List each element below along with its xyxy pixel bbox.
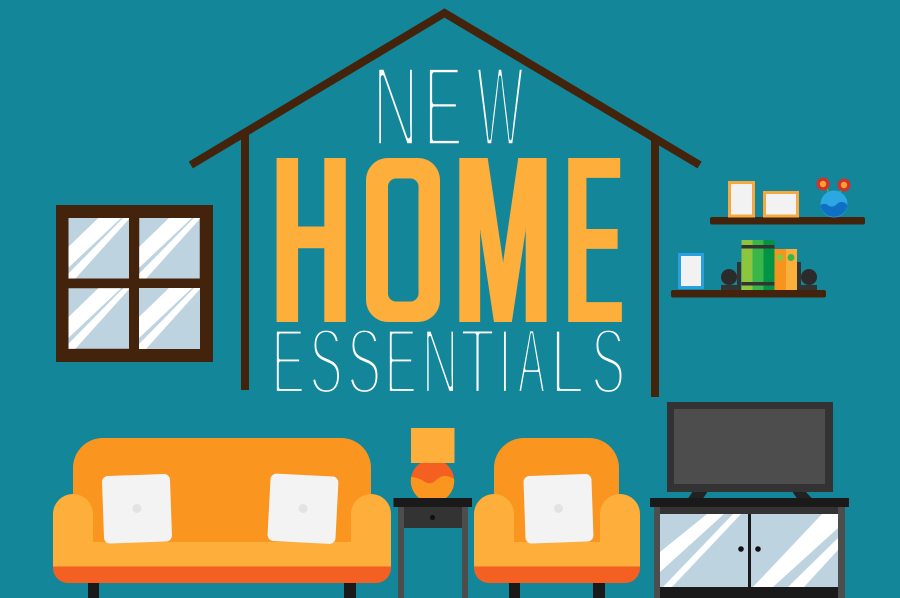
sofa bbox=[53, 438, 391, 598]
landscape frame bbox=[764, 192, 798, 216]
shelf board bbox=[710, 217, 865, 224]
drawer knob bbox=[430, 515, 435, 520]
lamp bbox=[410, 428, 454, 498]
title: new: W bbox=[476, 41, 524, 171]
title: essentials: A bbox=[518, 309, 546, 414]
chair cushion bbox=[523, 474, 594, 544]
sofa legs bbox=[88, 583, 356, 598]
chair back bbox=[494, 438, 619, 545]
door knobs bbox=[738, 546, 761, 552]
left door glass bbox=[660, 514, 748, 587]
cabinet sides bbox=[654, 507, 845, 598]
chair seat and arms bbox=[474, 494, 640, 567]
sofa back bbox=[73, 438, 371, 545]
cabinet upper rail bbox=[660, 507, 838, 514]
window bbox=[56, 205, 213, 362]
upper shelf bbox=[710, 178, 865, 224]
orange books bbox=[774, 249, 797, 290]
cabinet top bbox=[650, 498, 849, 507]
table legs bbox=[398, 507, 468, 598]
lamp shade bbox=[411, 428, 454, 463]
table top bbox=[394, 498, 472, 507]
green books bbox=[742, 240, 774, 290]
tv screen bbox=[674, 409, 825, 484]
title: home: O bbox=[359, 92, 447, 386]
sofa base bbox=[53, 566, 391, 583]
title: essentials: S bbox=[591, 310, 625, 415]
title: essentials: S bbox=[309, 309, 343, 414]
lower shelf bbox=[671, 240, 826, 298]
house outline bbox=[191, 13, 700, 397]
armchair bbox=[474, 438, 640, 598]
title: essentials: N bbox=[422, 310, 459, 415]
title: home: E bbox=[566, 100, 622, 380]
tv body bbox=[667, 402, 833, 492]
chair legs bbox=[509, 583, 605, 598]
tv stand feet bbox=[688, 491, 812, 498]
title: home: H bbox=[272, 100, 350, 379]
title: essentials: I bbox=[498, 309, 512, 414]
title: new bbox=[372, 41, 524, 171]
right speaker bbox=[797, 262, 817, 290]
title: essentials: T bbox=[460, 310, 495, 414]
title: home: M bbox=[454, 102, 551, 380]
lamp base bbox=[410, 463, 454, 498]
title: new: E bbox=[423, 42, 463, 171]
shelf board bbox=[671, 290, 826, 298]
roof bbox=[191, 13, 700, 165]
left cushion bbox=[102, 474, 172, 544]
right wall bbox=[651, 140, 659, 397]
sofa seat and arms bbox=[53, 494, 391, 567]
left speaker bbox=[721, 262, 741, 290]
portrait frame bbox=[730, 182, 754, 216]
tv cabinet bbox=[650, 498, 849, 598]
title: essentials: E bbox=[384, 308, 417, 414]
table drawer bbox=[404, 507, 462, 528]
title: essentials: L bbox=[550, 309, 584, 414]
bottom-left pane bbox=[68, 288, 129, 349]
title: essentials bbox=[271, 308, 625, 415]
vase with flowers bbox=[816, 178, 850, 218]
chair base bbox=[474, 566, 640, 583]
blue frame bbox=[680, 254, 702, 288]
title: essentials: E bbox=[271, 310, 305, 415]
title: essentials: S bbox=[347, 310, 381, 415]
top-left pane bbox=[68, 218, 129, 278]
title: new: N bbox=[372, 41, 419, 171]
title: home bbox=[276, 158, 622, 322]
right door glass bbox=[751, 514, 838, 587]
right cushion bbox=[267, 473, 339, 544]
television bbox=[667, 402, 833, 498]
left wall bbox=[241, 135, 249, 390]
bottom-right pane bbox=[139, 288, 200, 349]
door divider bbox=[748, 514, 751, 587]
side table bbox=[394, 498, 472, 598]
cabinet bottom rail bbox=[660, 587, 838, 598]
top-right pane bbox=[139, 218, 200, 278]
window frame bbox=[56, 205, 213, 362]
